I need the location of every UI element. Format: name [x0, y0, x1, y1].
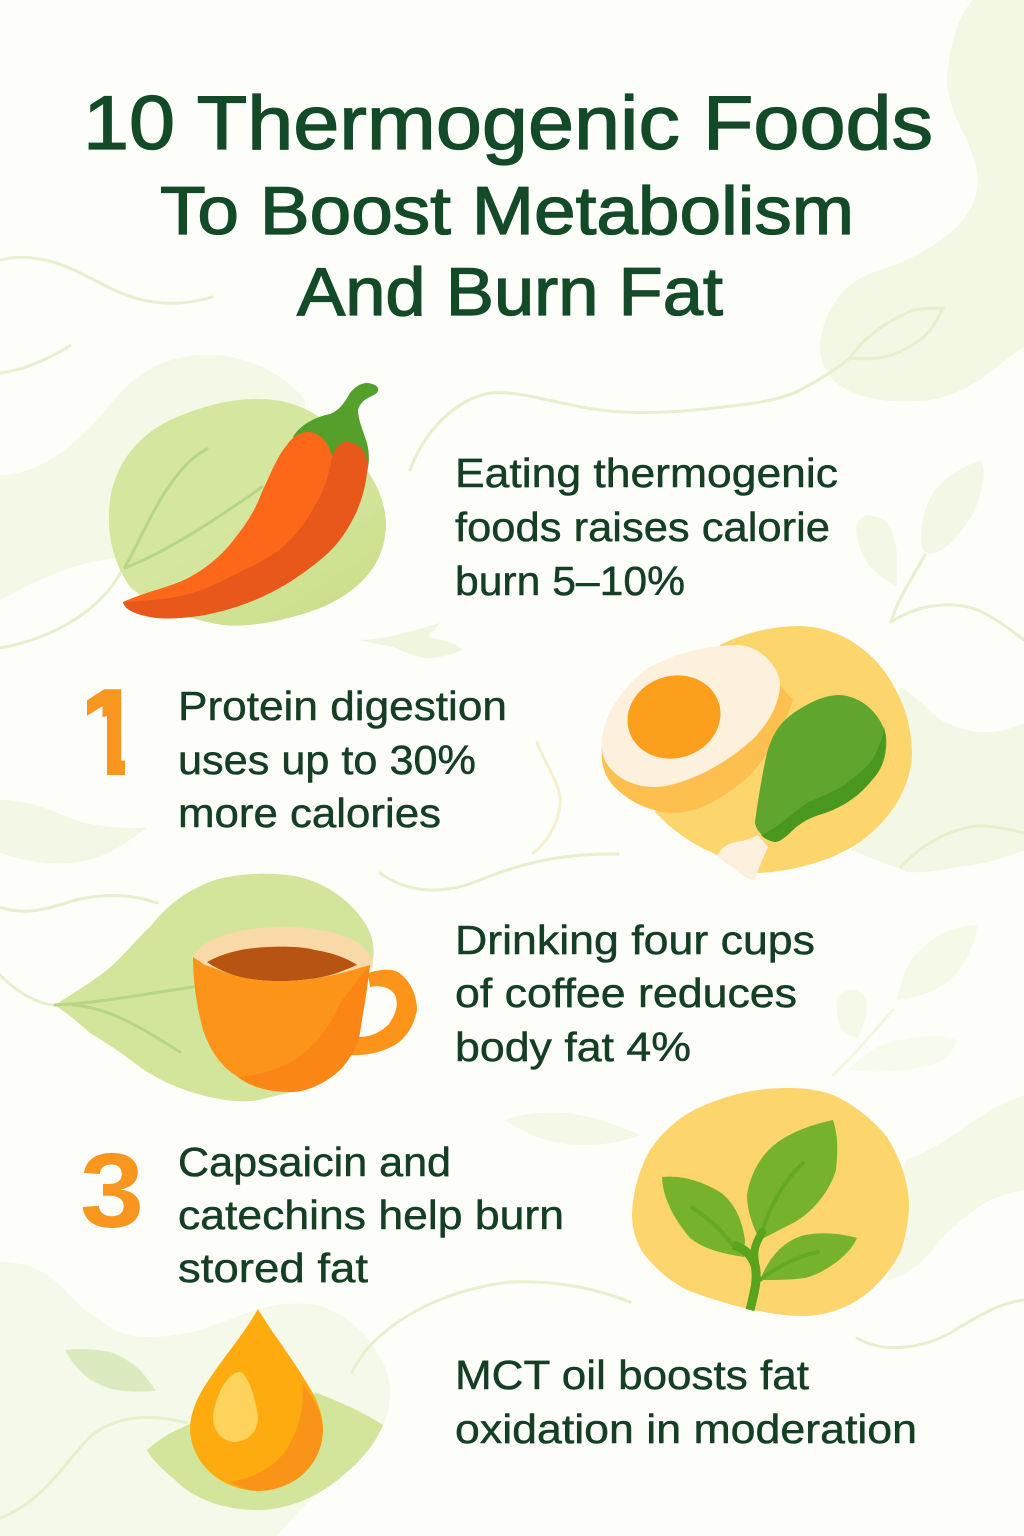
number 1: 1	[75, 664, 143, 800]
text: protein digestion: uses up to 30%	[178, 737, 476, 783]
text: protein digestion	[178, 683, 507, 836]
text: coffee: of coffee reduces	[455, 970, 797, 1016]
text: capsaicin: catechins help burn	[178, 1192, 564, 1238]
title: And Burn Fat	[297, 254, 723, 330]
text: calorie burn	[455, 450, 838, 604]
text: calorie burn: foods raises calorie	[455, 504, 830, 550]
text: calorie burn: burn 5–10%	[455, 558, 685, 604]
title: To Boost Metabolism	[160, 173, 854, 249]
text: MCT oil	[455, 1352, 917, 1452]
text: coffee: Drinking four cups	[455, 917, 815, 963]
icon: oil drop	[147, 1309, 383, 1510]
icon: coffee cup	[55, 874, 417, 1101]
text: coffee: body fat 4%	[455, 1024, 691, 1070]
text: calorie burn: Eating thermogenic	[455, 450, 838, 496]
text: capsaicin	[178, 1139, 564, 1291]
icon: green tea leaves	[632, 1088, 909, 1316]
text: protein digestion: Protein digestion	[178, 683, 507, 729]
text: capsaicin: stored fat	[178, 1245, 369, 1291]
text: MCT oil: MCT oil boosts fat	[455, 1352, 810, 1398]
icon: chili pepper	[109, 383, 386, 626]
title	[83, 81, 933, 330]
title: 10 Thermogenic Foods	[83, 81, 933, 166]
text: coffee	[455, 917, 815, 1070]
text: protein digestion: more calories	[178, 790, 441, 836]
text: MCT oil: oxidation in moderation	[455, 1406, 917, 1452]
icon: egg and chicken	[602, 626, 912, 880]
text: capsaicin: Capsaicin and	[178, 1139, 451, 1185]
number 3: 3	[80, 1132, 144, 1250]
